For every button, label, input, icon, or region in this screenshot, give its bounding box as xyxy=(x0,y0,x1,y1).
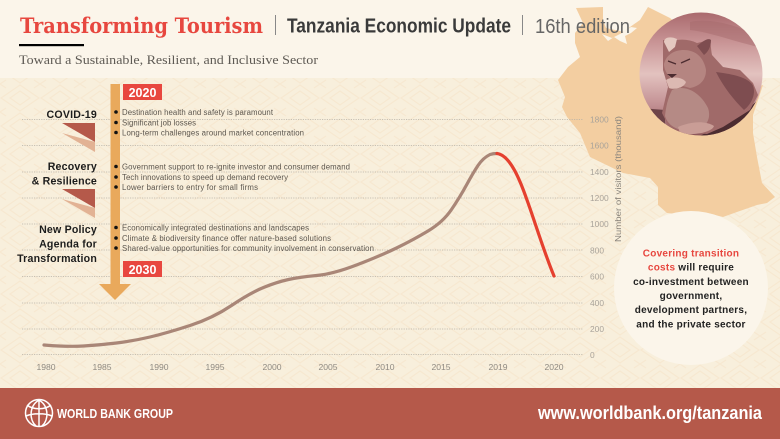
section: New Policy Agenda xyxy=(17,224,374,265)
section: Recovery and Resilience: Recovery xyxy=(48,161,97,173)
y axis title: Number of visitors (thousand) xyxy=(613,116,623,242)
y axis labels: 1800 xyxy=(590,114,609,124)
map of Tanzania xyxy=(558,7,775,217)
section: New Policy Agenda: Shared-value opportunities for community involvement in conservation xyxy=(122,244,374,253)
y axis labels: 1600 xyxy=(590,140,609,150)
x axis labels: 1995 xyxy=(205,362,225,372)
y axis labels: 1400 xyxy=(590,167,609,177)
line chart: visitors xyxy=(44,154,554,346)
title rule xyxy=(19,44,84,46)
timeline arrow xyxy=(99,84,131,300)
y axis labels xyxy=(590,114,609,360)
logo wordmark: WORLD BANK GROUP xyxy=(57,406,173,421)
section: Recovery and Resilience: Government support to re-ignite investor and consumer demand xyxy=(122,162,350,172)
x axis labels: 2005 xyxy=(318,362,338,372)
section: Recovery and Resilience xyxy=(32,161,350,192)
subtitle: Toward a Sustainable, Resilient, and Inclusive Sector xyxy=(19,52,319,67)
y axis labels: 200 xyxy=(590,324,604,334)
section: Recovery and Resilience: & Resilience xyxy=(32,176,97,188)
x axis labels: 2000 xyxy=(262,362,282,372)
title: 16th edition xyxy=(535,15,630,38)
section: Recovery and Resilience: Tech innovations to speed up demand recovery xyxy=(122,173,288,182)
section: New Policy Agenda: New Policy xyxy=(39,224,97,236)
y axis labels: 600 xyxy=(590,272,604,282)
section: New Policy Agenda: Climate & biodiversity finance offer nature-based solutions xyxy=(122,234,331,243)
x axis labels: 1990 xyxy=(149,362,169,372)
section: COVID-19: Destination health and safety is paramount xyxy=(122,108,274,117)
title: Transforming Tourism xyxy=(20,13,263,38)
section: COVID-19 xyxy=(47,108,304,138)
title xyxy=(20,13,630,38)
icon: triangles 2 xyxy=(62,189,95,218)
x axis labels xyxy=(36,362,564,372)
badge: 2030 xyxy=(123,261,162,277)
section: COVID-19: Significant job losses xyxy=(122,118,196,128)
x axis labels: 2015 xyxy=(431,362,451,372)
x axis labels: 2020 xyxy=(544,362,564,372)
callout circle: development partners, xyxy=(635,305,747,316)
callout circle: costs will require xyxy=(648,262,734,274)
y axis labels: 0 xyxy=(590,350,595,360)
section: New Policy Agenda: Agenda for xyxy=(39,238,97,250)
section: COVID-19: Long-term challenges around market concentration xyxy=(122,128,304,138)
section: New Policy Agenda: Economically integrated destinations and landscapes xyxy=(122,224,309,232)
x axis labels: 1980 xyxy=(36,362,56,372)
icon: triangles 1 xyxy=(62,123,95,152)
footer bar xyxy=(0,388,780,439)
badge: 2020: 2020 xyxy=(129,86,156,100)
section: COVID-19: COVID-19 xyxy=(47,109,97,121)
website URL: www.worldbank.org/tanzania xyxy=(537,403,763,423)
x axis labels: 2019 xyxy=(488,362,508,372)
callout circle: and the private sector xyxy=(636,320,746,330)
section: Recovery and Resilience: Lower barriers to entry for small firms xyxy=(122,183,258,192)
callout circle xyxy=(614,211,768,365)
y axis labels: 1000 xyxy=(590,219,609,229)
badge: 2020 xyxy=(123,84,162,100)
y axis labels: 1200 xyxy=(590,193,609,203)
y axis labels: 800 xyxy=(590,246,604,256)
callout circle: government, xyxy=(660,291,722,302)
title: Tanzania Economic Update xyxy=(287,16,511,38)
patterned chart band xyxy=(0,78,780,388)
lioness body xyxy=(662,40,758,134)
photo: lioness xyxy=(639,12,763,136)
section: New Policy Agenda: Transformation xyxy=(17,253,97,265)
callout circle: co-investment between xyxy=(633,277,749,288)
x axis labels: 1985 xyxy=(92,362,112,372)
y axis labels: 400 xyxy=(590,298,604,308)
badge: 2030: 2030 xyxy=(129,263,156,277)
icon: World Bank globe xyxy=(26,400,52,426)
callout circle: Covering transition xyxy=(643,248,739,260)
x axis labels: 2010 xyxy=(375,362,395,372)
lake highlight xyxy=(602,27,637,44)
